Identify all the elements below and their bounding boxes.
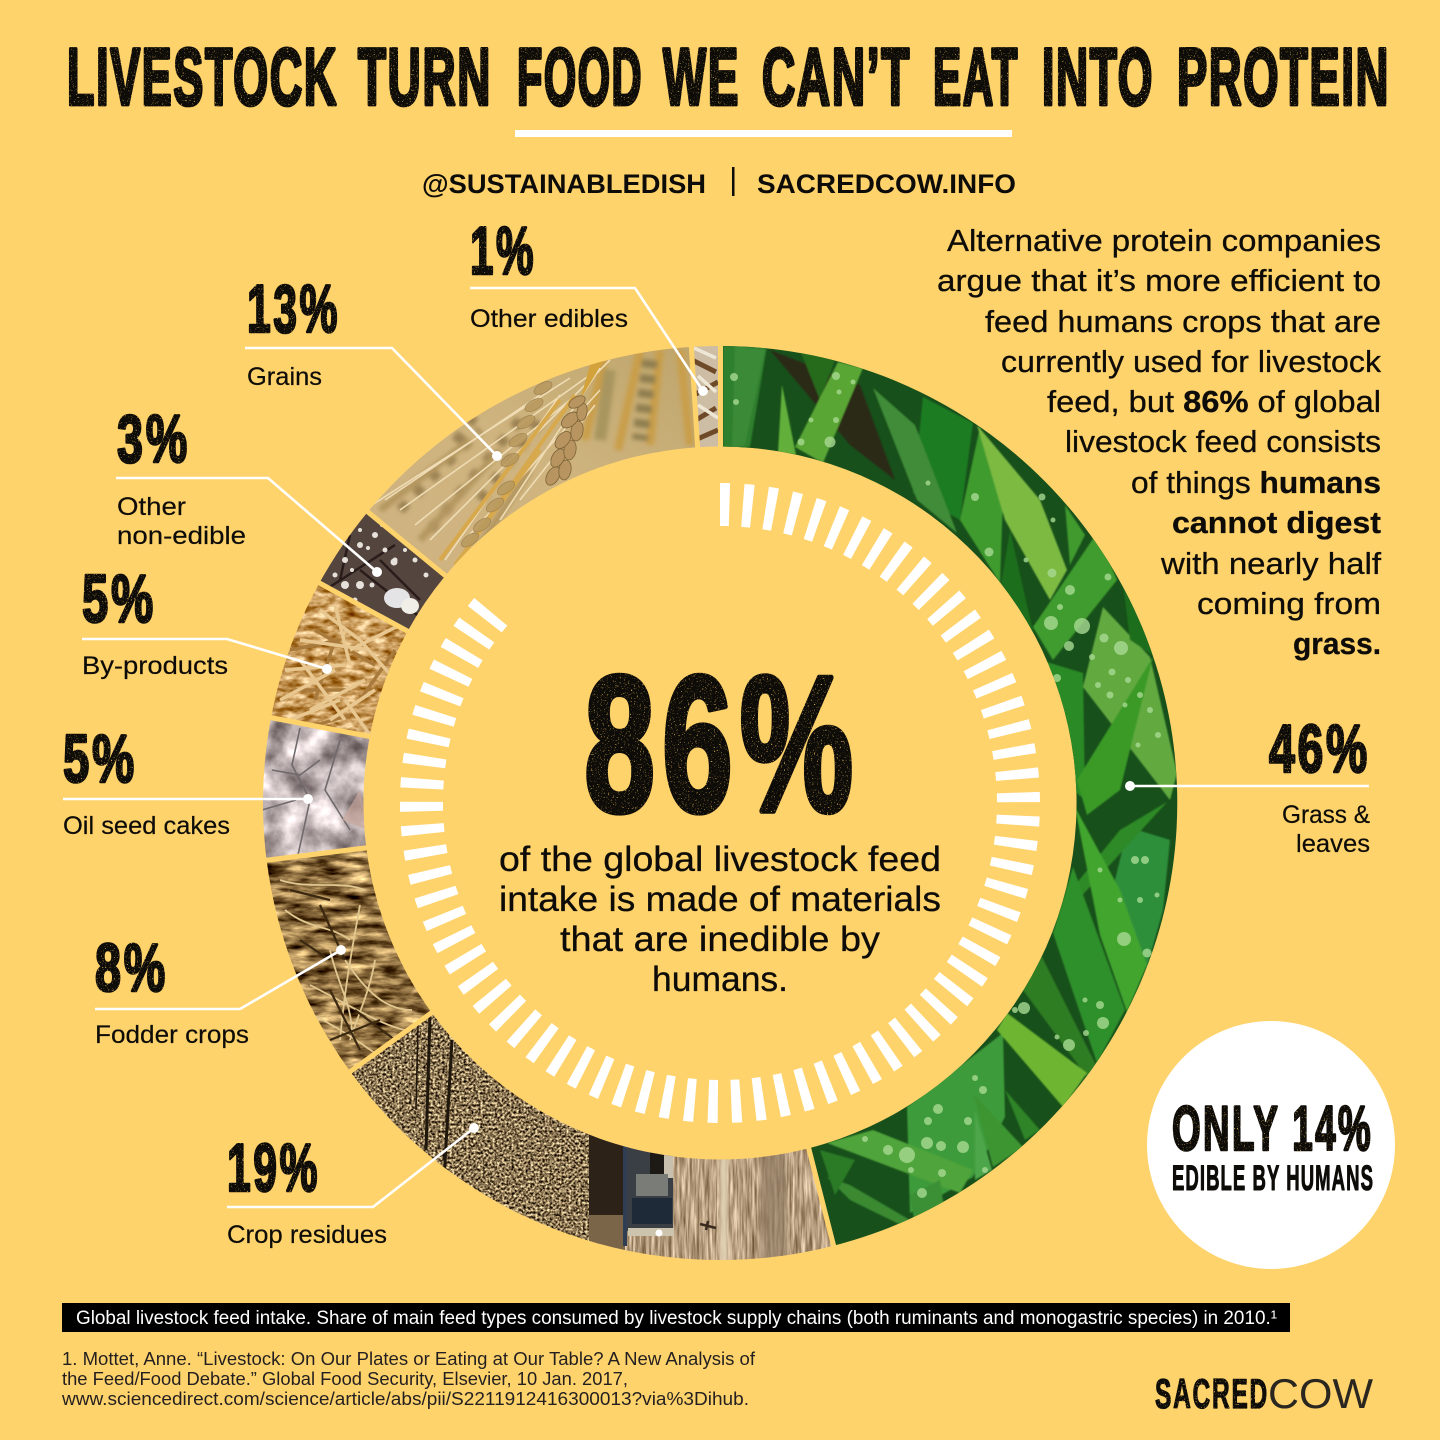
- paragraph: alternative protein argument: with nearly half: [1160, 546, 1381, 581]
- handles row: SACREDCOW.INFO: [757, 169, 1016, 199]
- segment: crop residues 19%: [352, 1014, 832, 1260]
- logo: Sacred Cow: SACRED: [1155, 1370, 1269, 1417]
- label: 5% oil seed cakes: Oil seed cakes: [63, 812, 230, 840]
- label: 8% fodder crops: Fodder crops: [95, 1021, 249, 1049]
- label: 13% grains: [245, 271, 502, 461]
- title: INTO: [1042, 32, 1154, 122]
- segment: by-products 5%: [272, 585, 406, 734]
- label: 5% by-products: 5%: [82, 561, 156, 637]
- title: CAN’T: [762, 32, 911, 122]
- label: 5% oil seed cakes: [63, 721, 313, 840]
- title: TURN: [358, 32, 492, 122]
- footnote citation: 1. Mottet, Anne. “Livestock: On Our Plates or Eating at Our Table? A New Analysis of: [62, 1349, 756, 1369]
- water droplets: [730, 372, 1161, 1198]
- label: 46% grass and leaves: leaves: [1296, 830, 1370, 858]
- paragraph: alternative protein argument: coming from: [1197, 586, 1381, 621]
- segment: fodder crops 8%: [267, 850, 430, 1070]
- label: 13% grains: Grains: [247, 363, 322, 391]
- label: 5% by-products: By-products: [82, 652, 228, 680]
- center description: that are inedible by: [560, 920, 881, 959]
- center description: intake is made of materials: [499, 880, 941, 919]
- footnote citation: [61, 1349, 756, 1409]
- center description: [499, 840, 941, 999]
- label: 46% grass and leaves: [1125, 711, 1370, 858]
- segment: oil seed cakes 5%: [263, 720, 370, 858]
- title: [67, 32, 1390, 122]
- icon: combine harvester: [623, 1146, 674, 1246]
- label: 3% other non-edible: non-edible: [117, 522, 246, 550]
- label: 19% crop residues: 19%: [227, 1130, 320, 1206]
- handles row: @SUSTAINABLEDISH: [422, 169, 706, 199]
- title: EAT: [933, 32, 1019, 122]
- label: 19% crop residues: Crop residues: [227, 1221, 387, 1249]
- title underline: [515, 130, 1012, 137]
- label: 19% crop residues: [227, 1123, 479, 1249]
- label: 3% other non-edible: [116, 401, 382, 577]
- title: LIVESTOCK: [67, 32, 338, 122]
- label: 3% other non-edible: Other: [117, 493, 186, 521]
- callout: only 14% edible by humans: [1147, 1021, 1395, 1269]
- segment gaps: [260, 340, 835, 1251]
- paragraph: alternative protein argument: grass.: [1293, 626, 1381, 661]
- label: 1% other edibles: Other edibles: [470, 305, 628, 333]
- segment: grass and leaves 46%: [715, 340, 1185, 1260]
- footnote citation: www.sciencedirect.com/science/article/abs/pii/S2211912416300013?via%3Dihub.: [61, 1389, 749, 1409]
- label: 46% grass and leaves: Grass &: [1282, 801, 1370, 829]
- big number: 86%: 86%: [584, 636, 860, 853]
- label: 8% fodder crops: 8%: [95, 930, 168, 1006]
- label: 1% other edibles: [470, 213, 708, 396]
- label: 1% other edibles: 1%: [470, 213, 536, 289]
- segment: other edibles 1%: [694, 346, 718, 447]
- label: 5% by-products: [82, 561, 332, 680]
- segment: other non-edible 3%: [320, 514, 444, 629]
- label: 3% other non-edible: 3%: [117, 401, 190, 477]
- title: WE: [663, 32, 740, 122]
- title: FOOD: [517, 32, 643, 122]
- logo: Sacred Cow: COW: [1268, 1370, 1373, 1417]
- label: 13% grains: 13%: [247, 271, 340, 347]
- chart caption bar: Global livestock feed intake. Share of main feed types consumed by livestock supply chains (both ruminants and monogastric species) in 2010.¹: [76, 1308, 1277, 1329]
- footnote citation: the Feed/Food Debate.” Global Food Security, Elsevier, 10 Jan. 2017,: [62, 1369, 628, 1389]
- center description: humans.: [652, 960, 788, 999]
- handles row: [422, 167, 1016, 199]
- paragraph: alternative protein argument: of things humans: [1131, 465, 1381, 500]
- paragraph: alternative protein argument: [937, 223, 1382, 661]
- paragraph: alternative protein argument: feed, but 86% of global: [1047, 384, 1381, 419]
- label: 8% fodder crops: [95, 930, 346, 1049]
- center description: of the global livestock feed: [499, 840, 941, 879]
- paragraph: alternative protein argument: livestock feed consists: [1065, 424, 1381, 459]
- donut chart: feed types: [255, 340, 1185, 1265]
- label: 46% grass and leaves: 46%: [1269, 711, 1370, 787]
- tick ring: 86 percent gauge: [421, 504, 1018, 1102]
- paragraph: alternative protein argument: feed humans crops that are: [985, 304, 1381, 339]
- paragraph: alternative protein argument: currently used for livestock: [1001, 344, 1382, 379]
- label: 5% oil seed cakes: 5%: [63, 721, 137, 797]
- segment: grains 13%: [360, 340, 700, 580]
- paragraph: alternative protein argument: Alternative protein companies: [947, 223, 1381, 258]
- paragraph: alternative protein argument: cannot digest: [1172, 505, 1381, 540]
- paragraph: alternative protein argument: argue that it’s more efficient to: [937, 263, 1381, 298]
